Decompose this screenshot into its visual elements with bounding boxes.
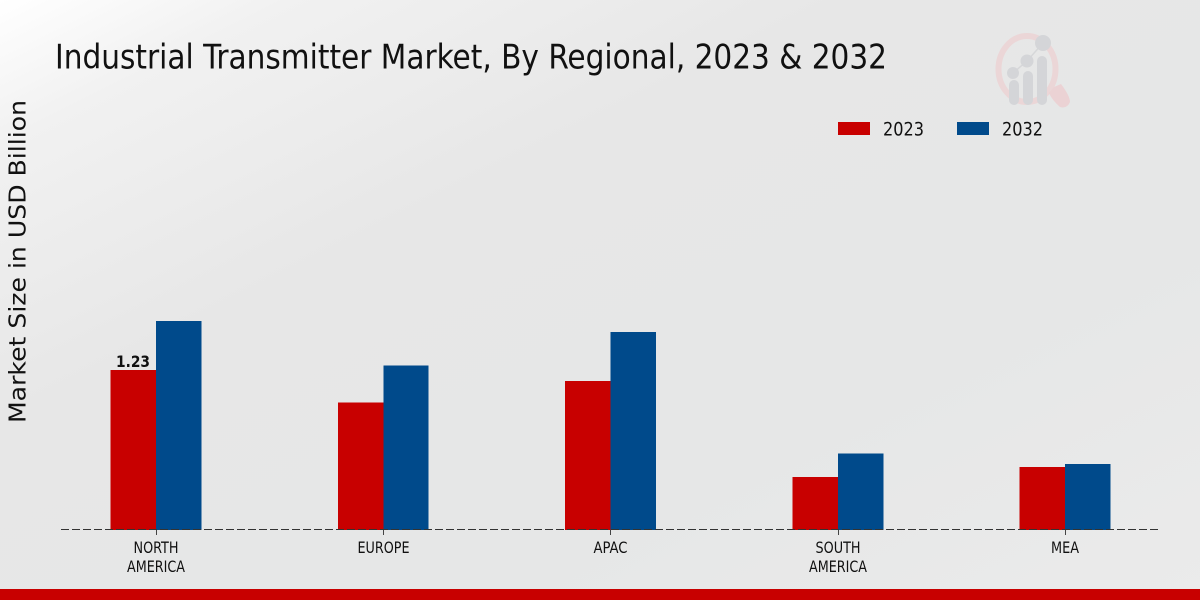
x label: South America: [809, 538, 867, 576]
South America bars: [792, 454, 884, 530]
data label: 1.23: 1.23: [116, 352, 150, 371]
y axis label: Market Size in USD Billion: [4, 100, 32, 423]
North America bars: [110, 321, 202, 530]
footer band: [0, 589, 1200, 600]
legend: 2023: 2023: [883, 118, 924, 140]
APAC bars: [565, 332, 656, 530]
bar chart: [61, 321, 1160, 576]
x label: South America: AMERICA: [809, 557, 867, 576]
legend: 2032: 2032: [1002, 118, 1043, 140]
x label: APAC: APAC: [594, 538, 628, 557]
Europe bars: [338, 366, 428, 530]
legend: [838, 118, 1043, 140]
x label: North America: NORTH: [134, 538, 178, 557]
legend: 2023: [838, 118, 924, 140]
title: Industrial Transmitter Market, By Regional, 2023 & 2032: [55, 38, 887, 78]
x label: South America: SOUTH: [816, 538, 860, 557]
x label: North America: [127, 538, 185, 576]
legend: 2032: [957, 118, 1043, 140]
x label: North America: AMERICA: [127, 557, 185, 576]
x label: MEA: MEA: [1051, 538, 1079, 557]
icon: logo watermark: [998, 35, 1070, 107]
x label: Europe: EUROPE: [358, 538, 410, 557]
MEA bars: [1020, 464, 1110, 530]
x axis: [61, 530, 1160, 535]
